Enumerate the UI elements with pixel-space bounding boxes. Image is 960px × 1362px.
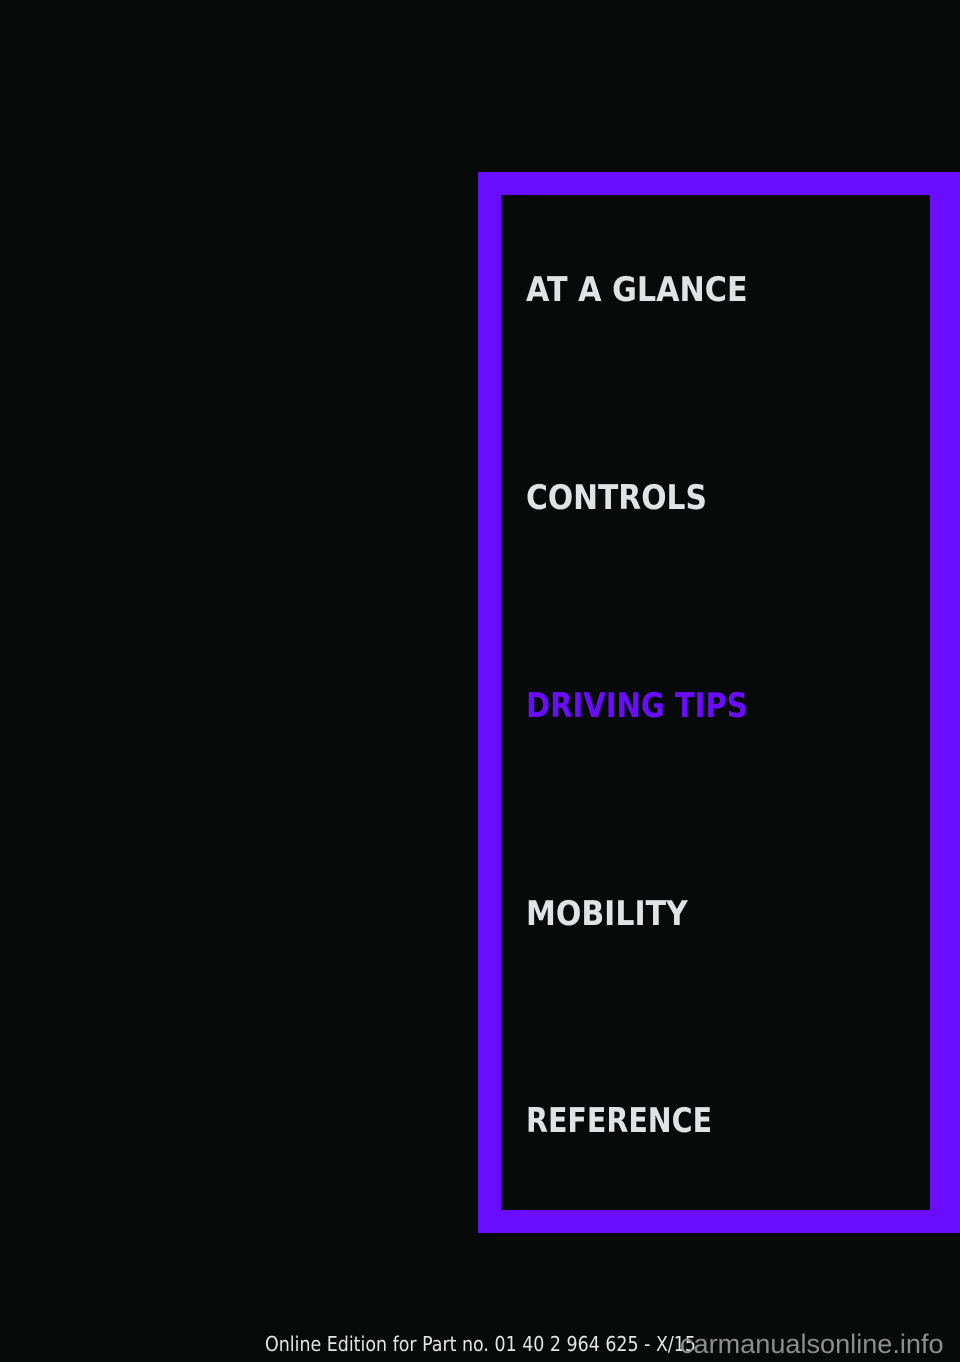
heading: reference: REFERENCE <box>526 1101 712 1140</box>
panel: frame interior <box>501 195 930 1210</box>
heading: at a glance: AT A GLANCE <box>526 270 748 309</box>
heading: controls: CONTROLS <box>526 478 707 517</box>
heading: driving tips (active): DRIVING TIPS <box>526 686 748 725</box>
heading: mobility: MOBILITY <box>526 894 688 933</box>
footer: watermark: carmanualsonline.info <box>680 1328 944 1359</box>
panel: navigation frame <box>478 172 960 1233</box>
footer: part number: Online Edition for Part no. 01 40 2 964 625 - X/15 <box>265 1332 696 1356</box>
